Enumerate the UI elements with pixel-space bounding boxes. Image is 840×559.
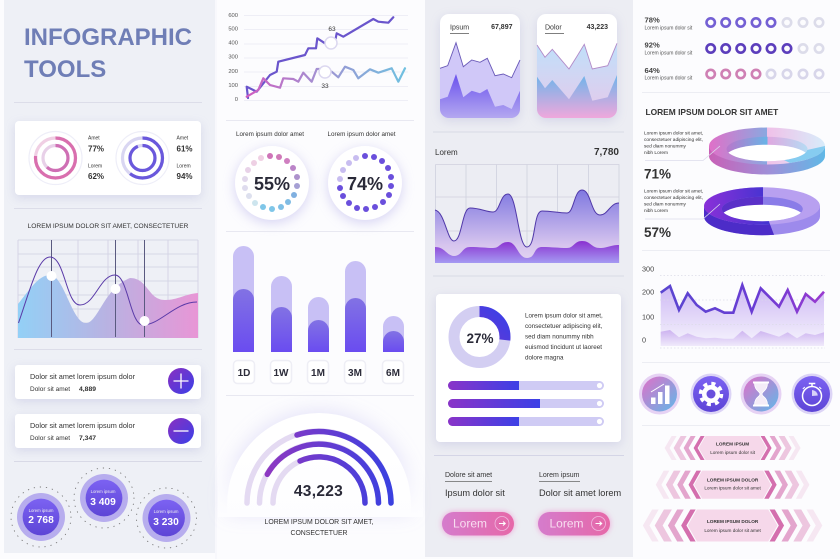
- banner 3: [643, 510, 822, 541]
- rating 64%: Lorem ipsum dolor sit: [644, 76, 693, 82]
- axis labels: 100: [228, 83, 238, 89]
- chart: area zigzag: 100: [642, 312, 654, 322]
- banner 2: Lorem ipsum dolor sit amet: [704, 486, 762, 490]
- stat: 3 409: Lorem ipsum: [91, 489, 116, 494]
- rating rows: [644, 16, 823, 82]
- rating 78%: 78%: [644, 16, 660, 24]
- text: 57%: consectetuer adipiscing elit,: [644, 195, 703, 201]
- banner 1: Lorem ipsum dolor sit: [710, 450, 756, 455]
- text: 57%: sed diam nonummy: [644, 202, 686, 208]
- button 1: Lorem: [453, 516, 487, 530]
- gauge: 43,223: [294, 483, 343, 500]
- dial: 55%: [235, 146, 309, 220]
- title: TOOLS: [24, 56, 106, 83]
- chart heading: Lorem: [435, 148, 458, 157]
- text columns: Lorem ipsum: [539, 472, 580, 479]
- dial: 74%: [328, 146, 402, 220]
- paragraph: euismod tincidunt ut laoreet: [525, 344, 602, 351]
- chart: area zigzag: 200: [642, 288, 654, 296]
- text columns: [445, 472, 622, 498]
- icon: blue rings: [116, 132, 169, 184]
- heading: wave chart: LOREM IPSUM DOLOR SIT AMET, CONSECTETUER: [28, 223, 189, 230]
- paragraph: dolore magna: [525, 354, 564, 362]
- button 2: Lorem: [550, 516, 584, 530]
- panel: mini chart Ipsum: Ipsum: [450, 24, 469, 32]
- bar chart: [233, 246, 404, 384]
- rating 92%: Lorem ipsum dolor sit: [644, 50, 693, 56]
- chart: wave area: [18, 240, 198, 338]
- banner 1: [665, 436, 801, 460]
- ring labels: 94%: [176, 172, 193, 181]
- rating 78%: Lorem ipsum dolor sit: [644, 26, 693, 32]
- ring labels: Lorem: [88, 164, 102, 170]
- axis labels: [228, 13, 238, 103]
- paragraph: sed diam nonummy nibh: [525, 334, 594, 340]
- text columns: Dolore sit amet: [445, 472, 492, 479]
- 3D donut 57%: [704, 187, 820, 235]
- dial labels: [236, 131, 396, 138]
- bar labels: 6M: [386, 368, 400, 379]
- icon: bar chart: [639, 374, 680, 414]
- stat circles: [11, 468, 196, 548]
- text columns: Dolor sit amet lorem: [539, 488, 622, 498]
- panel: mini chart Ipsum: 67,897: [491, 24, 513, 31]
- gauge: LOREM IPSUM DOLOR SIT AMET,: [264, 519, 374, 526]
- panel: donut and progress: [436, 294, 621, 442]
- bar labels: 1W: [274, 368, 289, 379]
- icon: minus: [168, 418, 194, 444]
- text: 71%: [644, 130, 720, 182]
- donut 27%: 27%: [466, 331, 494, 346]
- stat: 2 768: 2 768: [28, 515, 54, 526]
- panel: plus row: Dolor sit amet: [30, 386, 70, 393]
- text: 71%: 71%: [644, 166, 671, 182]
- axis labels: 500: [228, 26, 238, 32]
- gauge: CONSECTETUER: [290, 530, 348, 537]
- panel: progress rings card: [15, 121, 201, 195]
- chart heading: [435, 147, 619, 158]
- chart: line chart 63/33: 33: [321, 83, 329, 90]
- axis labels: 300: [228, 54, 238, 60]
- bar labels: 1D: [238, 368, 250, 379]
- panel: minus row: 7,347: [79, 435, 96, 442]
- dial: 74%: 74%: [347, 174, 383, 194]
- paragraph: [525, 312, 603, 362]
- button 1: [442, 512, 514, 536]
- panel: plus row: [15, 365, 201, 399]
- banner 2: [656, 471, 809, 499]
- stat: 2 768: [11, 487, 71, 547]
- panel: minus row: Dolor sit amet lorem ipsum dolor: [30, 421, 136, 430]
- ring labels: Amet: [176, 136, 189, 142]
- chart: wave double area: [435, 164, 619, 263]
- rating 92%: 92%: [644, 40, 660, 50]
- text: 71%: Lorem ipsum dolor sit amet,: [644, 130, 703, 136]
- bar labels: [234, 360, 404, 384]
- ring labels: 77%: [88, 144, 104, 154]
- icon: hourglass: [740, 374, 782, 414]
- heading: donuts: LOREM IPSUM DOLOR SIT AMET: [646, 107, 779, 117]
- chart: area zigzag: [642, 264, 825, 348]
- panel: minus row: Dolor sit amet: [30, 435, 70, 442]
- dial: 55%: 55%: [254, 174, 290, 194]
- stat: 3 230: [136, 488, 196, 548]
- text: 57%: [644, 188, 720, 240]
- text: 57%: 57%: [644, 225, 671, 240]
- rating 92%: [644, 40, 823, 56]
- paragraph: Lorem ipsum dolor sit amet,: [525, 312, 603, 320]
- panel: mini chart Dolor: Dolor: [545, 24, 562, 32]
- axis labels: 400: [228, 40, 238, 46]
- ring labels: Lorem: [176, 164, 191, 170]
- icon: stopwatch: [792, 374, 832, 414]
- icon: gear: [690, 374, 732, 414]
- stat: 3 230: Lorem ipsum: [154, 509, 179, 514]
- chart: line chart 63/33: 63: [328, 26, 336, 33]
- bar labels: 3M: [348, 368, 362, 379]
- text: 57%: Lorem ipsum dolor sit amet,: [644, 188, 703, 194]
- bar labels: 1M: [311, 368, 325, 379]
- text: 57%: nibh Lorem: [644, 208, 668, 214]
- panel: minus row: [15, 414, 201, 448]
- banner 3: Lorem ipsum dolor sit amet: [704, 528, 762, 533]
- panel: mini chart Ipsum: [440, 14, 520, 118]
- banner 1: LOREM IPSUM: [716, 442, 749, 446]
- axis labels: 600: [228, 13, 238, 19]
- text: 71%: sed diam nonummy: [644, 144, 686, 150]
- gauge: [218, 413, 423, 537]
- stat: 2 768: Lorem ipsum: [29, 508, 54, 513]
- 3D donut 71%: [709, 128, 825, 174]
- ring labels: [88, 136, 193, 181]
- panel: plus row: 4,889: [79, 386, 96, 393]
- dial labels: Lorem ipsum dolor amet: [328, 131, 396, 138]
- axis labels: 200: [228, 69, 238, 75]
- icon: plus: [168, 368, 194, 394]
- banner 2: LOREM IPSUM DOLOR: [707, 478, 759, 482]
- chart: line chart 63/33: [228, 13, 408, 103]
- rating 64%: [644, 66, 823, 82]
- progress bars: [448, 381, 604, 426]
- paragraph: consectetuer adipiscing elit,: [525, 323, 603, 330]
- icon: pink rings: [29, 132, 82, 184]
- panel: mini chart Dolor: 43,223: [587, 24, 608, 31]
- panel: mini chart Dolor: [537, 14, 617, 118]
- chart: area zigzag: 300: [642, 264, 654, 274]
- text: 71%: consectetuer adipiscing elit,: [644, 137, 703, 143]
- text: 71%: nibh Lorem: [644, 150, 668, 156]
- title: INFOGRAPHIC: [24, 24, 192, 51]
- axis labels: 0: [235, 97, 238, 103]
- rating 78%: [644, 16, 823, 32]
- panel: plus row: Dolor sit amet lorem ipsum dolor: [30, 372, 136, 381]
- chart heading: 7,780: [594, 147, 619, 158]
- donut 27%: [454, 312, 505, 362]
- rating 64%: 64%: [644, 66, 660, 75]
- dial labels: Lorem ipsum dolor amet: [236, 131, 304, 138]
- stat: 3 409: [74, 468, 134, 528]
- ring labels: 61%: [176, 144, 193, 154]
- banner 3: LOREM IPSUM DOLOR: [707, 519, 759, 524]
- ring labels: 62%: [88, 172, 104, 181]
- stat: 3 230: 3 230: [153, 517, 179, 528]
- stat: 3 409: 3 409: [90, 497, 116, 508]
- text columns: Ipsum dolor sit: [445, 488, 505, 498]
- title: [24, 24, 192, 83]
- chart: area zigzag: 0: [642, 336, 646, 344]
- ring labels: Amet: [88, 136, 100, 142]
- button 2: [538, 512, 610, 536]
